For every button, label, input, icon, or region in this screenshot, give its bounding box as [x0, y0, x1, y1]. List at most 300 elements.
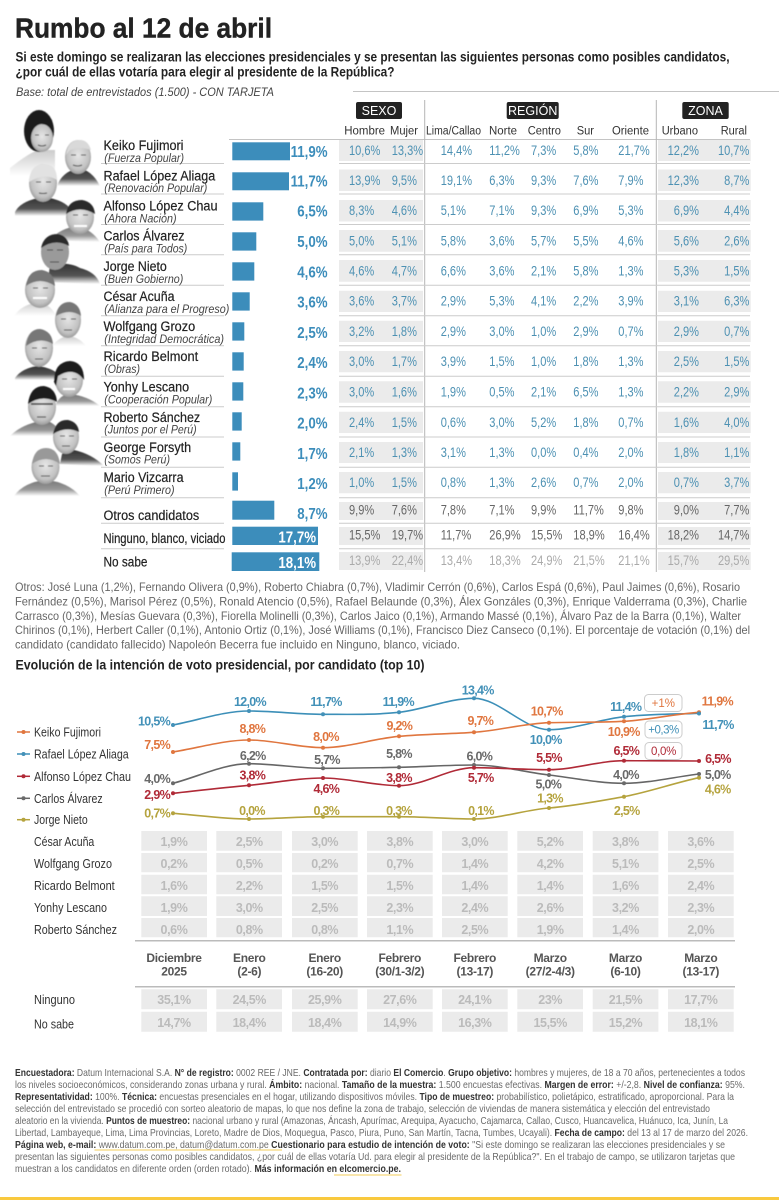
candidate names and parties: (País para Todos) — [104, 242, 187, 256]
column values: Centro: 1,0% — [531, 324, 556, 339]
column values: Rural — [718, 143, 749, 568]
column values: Lima/Callao: 0,8% — [441, 475, 466, 490]
section badge: SEXO — [356, 102, 402, 119]
column values: Lima/Callao: 11,7% — [441, 527, 471, 543]
column values: Oriente: 3,9% — [618, 293, 644, 309]
table row: No sabe: 14,7% — [157, 1016, 191, 1030]
labels: Rafael López Aliaga: 12,0% — [234, 695, 267, 709]
column values: Mujer: 1,8% — [392, 324, 417, 339]
table row: Ricardo Belmont: 1,5% — [311, 879, 338, 893]
table row: Ricardo Belmont: 1,4% — [461, 879, 489, 893]
column values: Hombre: 13,9% — [349, 173, 380, 188]
table row: Roberto Sánchez: 2,0% — [687, 923, 715, 937]
table row: Wolfgang Grozo: 0,2% — [311, 857, 338, 871]
total percentages — [291, 144, 328, 523]
table row: Yonhy Lescano: 3,2% — [612, 901, 639, 915]
table row: Yonhy Lescano: 3,0% — [236, 901, 263, 915]
column values: Norte: 18,3% — [489, 553, 521, 568]
table row: Ninguno: 25,9% — [308, 993, 342, 1007]
candidate names and parties: Mario Vizcarra — [104, 470, 184, 485]
table row: Yonhy Lescano: 2,5% — [311, 901, 338, 915]
column values: Oriente: 1,3% — [618, 263, 644, 279]
column values: Sur: 1,8% — [573, 354, 599, 369]
labels: Keiko Fujimori: 9,2% — [386, 719, 413, 733]
table row: Wolfgang Grozo: Wolfgang Grozo — [34, 857, 112, 871]
line: Jorge Nieto — [173, 778, 699, 819]
column values: Norte — [489, 143, 521, 568]
date headers: Enero — [308, 951, 341, 965]
column values: Lima/Callao: 13,4% — [441, 553, 472, 568]
table row: Roberto Sánchez: 1,4% — [612, 923, 639, 937]
line chart — [138, 684, 734, 821]
portrait: Keiko Fujimori — [10, 110, 55, 176]
column values: Rural: 2,9% — [724, 384, 749, 400]
labels: Carlos Álvarez — [144, 747, 731, 792]
table row: Ricardo Belmont: 1,4% — [537, 879, 564, 893]
table row: Ninguno: 24,1% — [458, 993, 492, 1007]
total percentages: 1,7% — [297, 446, 328, 463]
line: Keiko Fujimori — [173, 712, 699, 752]
column values: Norte: 3,0% — [489, 324, 515, 339]
methodology footnote: Representatividad: 100%. Técnica: encuestas presenciales en el hogar, utilizando dispositivos móviles. Tipo de muestreo: probabilístico, polietápico, estratificado, aproporcional. Para la — [15, 1091, 734, 1103]
column values: Mujer: 7,6% — [392, 502, 417, 518]
table header rule — [229, 92, 779, 140]
date headers: Marzo — [609, 951, 642, 965]
table row: César Acuña: 5,2% — [537, 835, 564, 849]
column values: Mujer: 13,3% — [392, 143, 423, 158]
labels: Carlos Álvarez: 5,0% — [535, 778, 562, 792]
column values: Hombre: 1,0% — [349, 475, 374, 490]
table row: Yonhy Lescano: Yonhy Lescano — [34, 901, 107, 915]
column values: Hombre: 9,9% — [349, 502, 374, 518]
table row: Ninguno: 17,7% — [684, 993, 718, 1007]
evolution heading: Evolución de la intención de voto presidencial, por candidato (top 10) — [16, 656, 424, 672]
total percentages: 3,6% — [297, 295, 328, 312]
column values: Lima/Callao: 5,8% — [441, 233, 466, 249]
column values: Oriente: 2,0% — [618, 475, 644, 490]
column values: Hombre: 8,3% — [349, 203, 374, 218]
column values: Mujer: 1,3% — [392, 445, 417, 460]
column values: Centro: 5,7% — [531, 233, 556, 249]
methodology footnote: Libertad, Lambayeque, Lima, Lima Provincias, Loreto, Madre de Dios, Moquegua, Pasco, Piura, Puno, San Martín, Tacna, Tumbes, Ucayali). Fecha de campo: del 13 al 17 de marzo del 2026. — [15, 1127, 748, 1139]
column values: Hombre: 2,4% — [349, 415, 374, 430]
column values: Hombre: 13,9% — [349, 553, 380, 568]
labels: Rafael López Aliaga: 11,7% — [702, 718, 734, 732]
change badge: López Aliaga +0,3%: +0,3% — [648, 724, 679, 736]
column values: Mujer: 22,4% — [392, 553, 423, 568]
legend item: Rafael López Aliaga: Rafael López Aliaga — [34, 748, 129, 762]
section badge: ZONA: ZONA — [688, 104, 724, 118]
column values: Rural: 1,5% — [724, 354, 749, 369]
column values: Urbano: 1,6% — [674, 415, 699, 430]
table row: César Acuña: 3,8% — [386, 835, 414, 849]
survey question: ¿por cuál de ellas votaría para elegir al presidente de la República? — [16, 64, 394, 80]
column headers: Oriente — [612, 126, 649, 138]
column headers: Rural — [721, 126, 747, 138]
table row: No sabe: 18,4% — [233, 1016, 266, 1030]
candidate names and parties: Yonhy Lescano — [104, 380, 189, 394]
change badge: López Chau 0,0%: 0,0% — [651, 746, 676, 758]
legend — [17, 726, 131, 827]
column values: Sur: 21,5% — [573, 553, 605, 568]
labels: Rafael López Aliaga — [138, 684, 734, 747]
table row: Wolfgang Grozo: 1,4% — [461, 857, 489, 871]
labels: Alfonso López Chau: 6,5% — [613, 744, 640, 758]
date headers: (30/1-3/2) — [375, 964, 425, 978]
column values: Norte: 3,6% — [489, 233, 515, 249]
labels: Keiko Fujimori: 10,9% — [608, 725, 640, 739]
column values: Urbano: 15,7% — [668, 553, 699, 568]
labels: Alfonso López Chau: 5,7% — [468, 771, 494, 785]
total percentages: 6,5% — [297, 204, 328, 221]
column values: Centro: 2,6% — [531, 475, 556, 490]
methodology footnote — [15, 1067, 748, 1175]
date headers: (6-10) — [610, 964, 641, 978]
column values: Sur: 6,5% — [573, 384, 599, 400]
column values: Urbano: 9,0% — [674, 502, 699, 518]
column values: Urbano — [668, 143, 699, 568]
portrait: Yonhy Lescano — [54, 361, 100, 406]
table row: Yonhy Lescano: 2,3% — [386, 901, 414, 915]
portrait: Ricardo Belmont — [15, 329, 58, 380]
column values: Sur: 5,8% — [573, 263, 599, 279]
portrait: man with dark hair and smile — [50, 200, 100, 242]
table row: Ricardo Belmont: 1,5% — [386, 879, 414, 893]
column values: Rural: 10,7% — [718, 143, 749, 158]
date headers — [146, 951, 719, 978]
column values: Rural: 8,7% — [724, 173, 749, 188]
labels: Jorge Nieto: 4,6% — [705, 782, 731, 796]
column values: Rural: 3,7% — [724, 475, 749, 490]
legend item: Carlos Álvarez: Carlos Álvarez — [34, 791, 103, 806]
labels: Rafael López Aliaga: 11,9% — [383, 695, 415, 709]
column values: Oriente: 7,9% — [618, 173, 644, 188]
labels: Alfonso López Chau: 5,5% — [536, 751, 562, 765]
line: Rafael López Aliaga — [173, 698, 699, 730]
column values: Rural: 2,6% — [724, 233, 749, 249]
methodology footnote: Encuestadora: Datum Internacional S.A. N° de registro: 0002 REE / JNE. Contratada por: diario El Comercio. Grupo objetivo: hombres y mujeres, de 18 a 70 años, pertenecientes a todos — [15, 1067, 745, 1079]
date headers: (2-6) — [237, 964, 262, 978]
section badge: REGIÓN: REGIÓN — [508, 103, 557, 118]
candidate names and parties: Otros candidatos — [104, 508, 199, 523]
column values: Sur: 2,2% — [573, 293, 599, 309]
column values: Rural: 4,4% — [724, 203, 749, 218]
labels: Carlos Álvarez: 4,0% — [144, 772, 171, 786]
column headers: Lima/Callao — [426, 126, 481, 138]
column headers: Centro — [528, 126, 561, 138]
candidate names and parties: Wolfgang Grozo — [104, 319, 195, 334]
candidate names and parties: Alfonso López Chau — [104, 198, 218, 214]
table row: Roberto Sánchez — [34, 918, 734, 937]
column headers: Sur — [577, 126, 594, 138]
column values: Sur: 18,9% — [573, 527, 605, 543]
date headers: (27/2-4/3) — [526, 964, 575, 978]
table row: No sabe: 18,1% — [684, 1016, 718, 1030]
total percentages: 1,2% — [297, 476, 328, 493]
column values: Centro: 24,9% — [531, 553, 562, 568]
date headers: Marzo — [534, 951, 567, 965]
table row: Ricardo Belmont — [34, 875, 734, 894]
table row: Wolfgang Grozo: 2,5% — [687, 857, 715, 871]
date headers: Enero — [233, 951, 266, 965]
column headers: Norte — [489, 126, 517, 138]
column values: Centro: 2,1% — [531, 263, 556, 279]
column values: Sur: 7,6% — [573, 173, 599, 188]
labels: Keiko Fujimori — [144, 694, 734, 752]
column values: Oriente: 21,1% — [618, 553, 650, 568]
labels: Rafael López Aliaga: 10,0% — [530, 733, 562, 747]
column values: Mujer: 5,1% — [392, 233, 417, 249]
column values: Centro: 1,0% — [531, 354, 556, 369]
column values: Centro: 9,9% — [531, 502, 556, 518]
row separators — [101, 164, 750, 549]
candidate names and parties: (Somos Perú) — [104, 452, 170, 466]
candidate names and parties: Keiko Fujimori — [104, 138, 184, 153]
note: other candidates: candidato (candidato fallecido) Napoleón Becerra fue incluido en Ninguno, blanco, viciado. — [15, 638, 460, 652]
labels: Rafael López Aliaga: 13,4% — [462, 684, 494, 698]
column values: Norte: 11,2% — [489, 143, 520, 158]
link underlines — [94, 1150, 402, 1175]
total percentages: 11,9% — [291, 144, 328, 161]
column values: Lima/Callao: 19,1% — [441, 173, 472, 188]
column values: Hombre: 4,6% — [349, 263, 374, 279]
legend item: Keiko Fujimori: Keiko Fujimori — [34, 726, 101, 740]
column values: Hombre: 2,1% — [349, 445, 374, 460]
column values: Lima/Callao: 3,9% — [441, 354, 466, 369]
column values: Lima/Callao: 3,1% — [441, 445, 466, 460]
column values: Rural: 1,5% — [724, 263, 749, 279]
column values: Centro: 5,2% — [531, 415, 556, 430]
column values: Oriente: 0,7% — [618, 324, 644, 339]
total percentages: 4,6% — [297, 265, 328, 282]
grey cell backgrounds — [339, 140, 751, 570]
legend item: Alfonso López Chau: Alfonso López Chau — [34, 770, 131, 784]
table row: Roberto Sánchez: 0,8% — [311, 923, 338, 937]
column values: Centro: 9,3% — [531, 203, 556, 218]
column values: Mujer: 19,7% — [392, 527, 423, 543]
column values: Mujer: 4,7% — [392, 263, 417, 279]
column values: Mujer: 1,5% — [392, 475, 417, 490]
column values: Centro — [531, 143, 562, 568]
labels: Jorge Nieto: 2,5% — [614, 804, 640, 818]
methodology footnote: muestran a los candidatos en diferente orden (orden rotado). Más información en elcomercio.pe. — [15, 1163, 401, 1175]
survey base note: Base: total de entrevistados (1.500) - CON TARJETA — [16, 85, 274, 99]
column values: Hombre: 15,5% — [349, 527, 380, 543]
column values: Hombre: 5,0% — [349, 233, 374, 249]
column values: Oriente: 0,7% — [618, 415, 644, 430]
section badge: SEXO: SEXO — [362, 104, 397, 118]
column values: Sur: 0,7% — [573, 475, 599, 490]
portrait: George Forsyth — [53, 420, 104, 466]
column values: Mujer: 1,6% — [392, 384, 417, 400]
portrait: Mario Vizcarra — [14, 448, 80, 496]
line: Carlos Álvarez — [173, 764, 699, 783]
column values: Lima/Callao: 14,4% — [441, 143, 472, 158]
table row: Yonhy Lescano: 2,6% — [537, 901, 564, 915]
table row: César Acuña: César Acuña — [34, 835, 94, 849]
column values: Oriente: 16,4% — [618, 527, 650, 543]
candidate names and parties: (Fuerza Popular) — [104, 151, 184, 165]
column values: Rural: 4,0% — [724, 415, 749, 430]
white percentages inside long bars — [278, 529, 316, 572]
change badge: Keiko +1% — [644, 694, 682, 712]
title: Rumbo al 12 de abril — [15, 12, 272, 44]
column values: Hombre: 3,6% — [349, 293, 374, 309]
column values: Urbano: 12,3% — [668, 173, 699, 188]
candidate names and parties: Carlos Álvarez — [104, 228, 185, 244]
table row: Ninguno: 27,6% — [383, 993, 417, 1007]
column values: Centro: 4,1% — [531, 293, 556, 309]
candidate names and parties: (Juntos por el Perú) — [104, 422, 197, 436]
labels: Keiko Fujimori: 7,5% — [144, 738, 171, 752]
table row: Ninguno: 35,1% — [157, 993, 191, 1007]
labels: Alfonso López Chau: 3,8% — [239, 768, 266, 782]
labels: Carlos Álvarez: 5,8% — [386, 747, 412, 761]
labels: Alfonso López Chau: 6,5% — [705, 752, 731, 766]
column values: Oriente: 4,6% — [618, 233, 644, 249]
column values: Lima/Callao — [441, 143, 472, 568]
table row: Ninguno: 24,5% — [233, 993, 266, 1007]
column values: Lima/Callao: 2,9% — [441, 293, 466, 309]
candidate names and parties: (Renovación Popular) — [104, 181, 207, 195]
column values: Urbano: 2,9% — [674, 324, 699, 339]
column values: Hombre: 3,0% — [349, 384, 374, 400]
candidate names and parties — [104, 138, 229, 570]
table row: Ninguno: 21,5% — [609, 993, 643, 1007]
column values: Mujer — [392, 143, 423, 568]
labels: Carlos Álvarez: 6,0% — [466, 750, 493, 764]
date headers: (13-17) — [683, 964, 719, 978]
column headers — [344, 126, 747, 138]
line: Alfonso López Chau — [173, 761, 699, 793]
candidate names and parties: (Buen Gobierno) — [104, 272, 183, 286]
column values: Oriente — [618, 143, 650, 568]
candidate names and parties: (Cooperación Popular) — [104, 392, 212, 406]
column values: Rural: 6,3% — [724, 293, 749, 309]
date headers: (16-20) — [306, 964, 343, 978]
table row: Wolfgang Grozo: 0,2% — [161, 857, 188, 871]
labels: Carlos Álvarez: 4,0% — [613, 768, 639, 782]
column values: Mujer: 9,5% — [392, 173, 417, 188]
column values: Hombre: 10,6% — [349, 143, 380, 158]
date headers: Marzo — [684, 951, 717, 965]
column values: Lima/Callao: 7,8% — [441, 502, 466, 518]
column values: Oriente: 2,0% — [618, 445, 644, 460]
methodology footnote: los niveles socioeconómicos, considerando zonas urbana y rural. Ámbito: nacional. Tamaño de la muestra: 1.500 encuestas efectivas. Margen de error: +/-2,8. Nivel de confianza: 95%. — [15, 1078, 745, 1091]
bottom yellow band — [0, 1197, 779, 1200]
candidate portraits — [10, 110, 104, 496]
portrait: Wolfgang Grozo — [52, 302, 86, 346]
total percentages: 2,0% — [297, 416, 328, 433]
column values: Sur — [573, 143, 605, 568]
column values: Urbano: 2,5% — [674, 354, 699, 369]
column values: Urbano: 5,6% — [674, 233, 699, 249]
labels: Keiko Fujimori: 8,8% — [239, 722, 266, 736]
column values: Sur: 1,8% — [573, 415, 599, 430]
table row: César Acuña: 3,8% — [612, 835, 639, 849]
column values: Norte: 7,1% — [489, 502, 515, 518]
column values: Rural: 14,7% — [718, 527, 749, 543]
survey question — [16, 50, 730, 80]
column values: Urbano: 1,8% — [674, 445, 699, 460]
column values: Oriente: 5,3% — [618, 203, 644, 218]
labels: Carlos Álvarez: 5,7% — [314, 753, 340, 767]
date headers: Febrero — [379, 951, 421, 965]
column values: Centro: 2,1% — [531, 384, 556, 400]
column values: Hombre: 3,0% — [349, 354, 374, 369]
column values: Norte: 1,3% — [489, 475, 515, 490]
labels: Rafael López Aliaga: 11,7% — [310, 695, 342, 709]
total percentages: 2,4% — [297, 355, 328, 372]
table row: No sabe: 18,4% — [308, 1016, 342, 1030]
table row: Roberto Sánchez: 0,6% — [161, 923, 188, 937]
column values: Norte: 5,3% — [489, 293, 515, 309]
labels: Jorge Nieto: 0,1% — [468, 804, 494, 818]
labels: Keiko Fujimori: 10,7% — [531, 704, 563, 718]
table row: Yonhy Lescano: 2,4% — [461, 901, 489, 915]
white percentages inside long bars: 17,7% — [278, 529, 316, 547]
table row: Wolfgang Grozo: 0,5% — [236, 857, 263, 871]
total percentages: 5,0% — [297, 234, 328, 251]
table row: Ninguno: Ninguno — [34, 993, 75, 1007]
column values: Urbano: 12,2% — [668, 143, 699, 158]
table row: Ricardo Belmont: 1,6% — [161, 879, 188, 893]
portrait: white haired man — [15, 164, 72, 216]
labels: Alfonso López Chau — [144, 744, 731, 802]
date headers: Diciembre — [146, 951, 202, 965]
date headers: 2025 — [161, 964, 187, 978]
table row: Roberto Sánchez: Roberto Sánchez — [34, 923, 117, 937]
table row: Ninguno: 23% — [538, 993, 562, 1007]
column values: Urbano: 6,9% — [674, 203, 699, 218]
labels: Jorge Nieto — [144, 782, 731, 820]
column values: Centro: 0,0% — [531, 445, 556, 460]
column values: Lima/Callao: 2,9% — [441, 324, 466, 339]
column values: Norte: 3,0% — [489, 415, 515, 430]
table row: Yonhy Lescano: 1,9% — [161, 901, 188, 915]
column values: Norte: 26,9% — [489, 527, 521, 543]
table row: No sabe: 15,5% — [533, 1016, 567, 1030]
column values: Oriente: 9,8% — [618, 502, 644, 518]
table row: No sabe: 15,2% — [609, 1016, 643, 1030]
column values: Norte: 6,3% — [489, 173, 515, 188]
candidate names and parties: (Integridad Democrática) — [104, 332, 224, 346]
column values: Lima/Callao: 1,9% — [441, 384, 466, 400]
column values: Urbano: 0,7% — [674, 475, 699, 490]
labels: Jorge Nieto: 0,7% — [144, 806, 171, 820]
portrait: Roberto Sánchez — [10, 386, 62, 436]
column values: Lima/Callao: 5,1% — [441, 203, 466, 218]
table row: César Acuña: 3,6% — [687, 835, 715, 849]
date headers: (13-17) — [457, 964, 493, 978]
table row: Roberto Sánchez: 1,9% — [537, 923, 564, 937]
labels: Keiko Fujimori: 11,9% — [702, 694, 734, 708]
labels: Jorge Nieto: 0,3% — [386, 804, 412, 818]
candidate names and parties: (Alianza para el Progreso) — [104, 302, 229, 316]
labels: Jorge Nieto: 0,0% — [239, 804, 265, 818]
labels: Jorge Nieto: 0,3% — [313, 804, 340, 818]
date header rules — [135, 941, 735, 987]
column values: Sur: 11,7% — [573, 502, 604, 518]
column values: Norte: 1,3% — [489, 445, 515, 460]
table row: No sabe: No sabe — [34, 1018, 74, 1032]
candidate names and parties: Roberto Sánchez — [104, 410, 200, 425]
table row: Roberto Sánchez: 2,5% — [461, 923, 489, 937]
column values: Urbano: 3,1% — [674, 293, 699, 309]
table row: Wolfgang Grozo: 4,2% — [537, 857, 564, 871]
table row: César Acuña: 3,0% — [461, 835, 489, 849]
table row: No sabe: 16,3% — [458, 1016, 492, 1030]
